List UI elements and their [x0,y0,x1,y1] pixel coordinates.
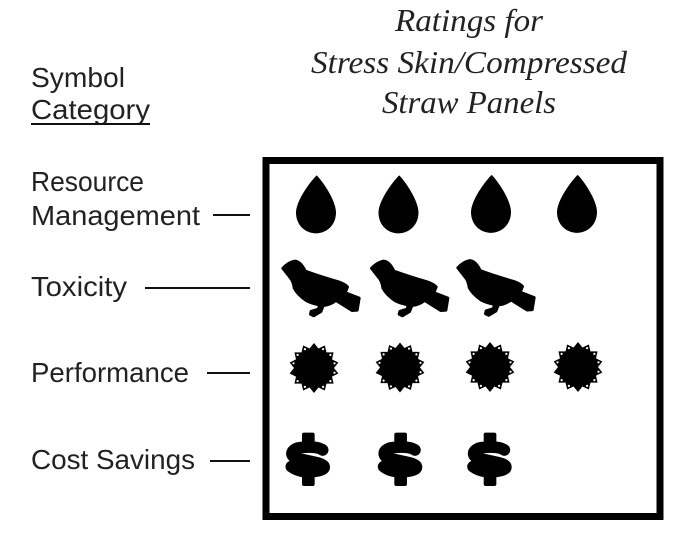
title: Straw Panels [382,84,556,120]
panel: ratings frame [266,160,660,516]
icon row: performance suns [290,342,602,393]
title [311,2,628,120]
icon row: toxicity birds [283,260,534,316]
icon row: cost savings dollars [291,433,506,486]
label: resource management: Resource [31,166,144,197]
title: Ratings for [394,2,544,38]
icon row: resource management drops [296,175,597,233]
label: cost savings: Cost Savings [31,444,195,475]
label: performance: Performance [31,357,189,388]
title: Stress Skin/Compressed [311,44,628,80]
label: resource management: Management [31,200,200,231]
label: toxicity: Toxicity [31,271,127,302]
heading: symbol category: Symbol [31,62,125,93]
heading: symbol category: Category [31,94,150,125]
heading: symbol category [31,62,150,125]
label: resource management [31,166,250,231]
